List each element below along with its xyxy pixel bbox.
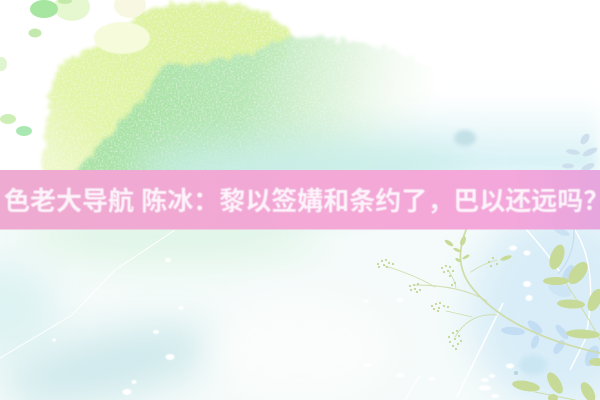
banner background (0, 170, 600, 230)
decorative circles (0, 0, 150, 136)
faded leaves upper right (562, 132, 599, 173)
blue leaves (501, 226, 600, 369)
green leaves (444, 235, 600, 400)
title banner (0, 170, 600, 230)
watercolor splash: aqua fade (130, 142, 470, 202)
upper sky wash (180, 95, 600, 175)
white light streaks and bokeh (0, 228, 591, 400)
small blue-grey dot (514, 371, 518, 375)
flower clusters (377, 257, 498, 350)
watercolor splash: green (72, 36, 440, 178)
banner title text: 色老大导航 陈冰：黎以签媾和条约了，巴以还远吗？ (4, 186, 600, 216)
plant stems (385, 230, 600, 400)
watercolor splash: yellow green (42, 3, 292, 176)
lower background wash (0, 207, 600, 400)
pale blurred spot (454, 130, 476, 146)
pale blue blurred spot (519, 355, 547, 375)
